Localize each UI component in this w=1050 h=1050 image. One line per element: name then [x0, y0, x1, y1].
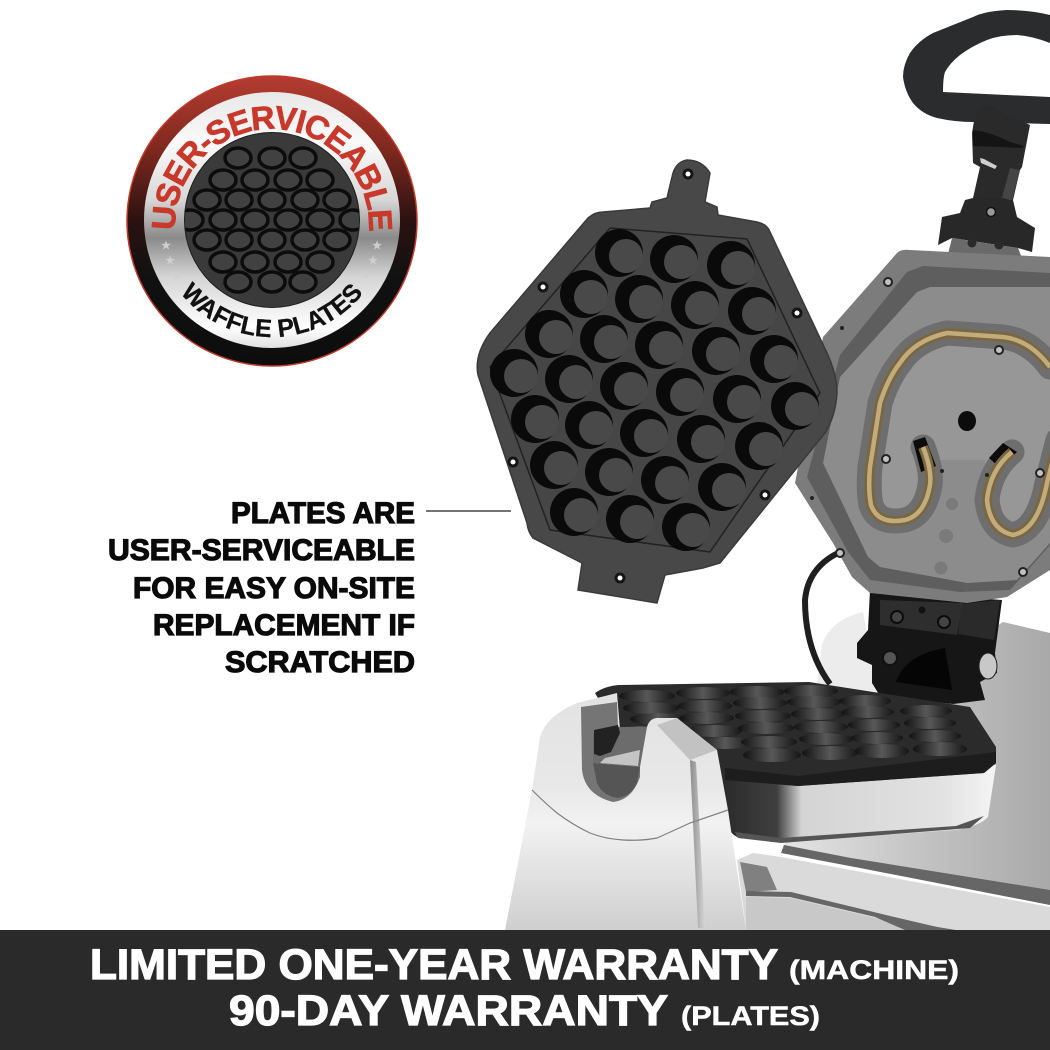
- lid inner field: [874, 345, 1050, 525]
- callout text: SCRATCHED: [225, 646, 415, 679]
- badge stars: ★: [372, 240, 382, 252]
- center hole: [958, 411, 976, 431]
- cup floors: [504, 239, 819, 547]
- plate cups: [490, 229, 819, 551]
- product: waffle maker: [477, 10, 1050, 930]
- footer warranty text: [90, 941, 959, 1035]
- lid bumps: [934, 498, 958, 574]
- badge stars: ★: [172, 270, 182, 282]
- badge arc heading: USER-SERVICEABLE: [152, 106, 392, 231]
- badge stars: ★: [361, 269, 371, 281]
- slot wall: [581, 702, 640, 802]
- arm crease: [690, 760, 705, 928]
- arm chamfer: [657, 718, 717, 760]
- slot pivot parts: [593, 727, 647, 767]
- arm seam: [532, 790, 728, 840]
- base back housing: [784, 622, 1050, 905]
- lid screws: [836, 278, 1044, 576]
- warranty line one: (MACHINE): [789, 955, 959, 985]
- callout text: FOR EASY ON-SITE: [133, 572, 415, 605]
- badge plate photo: [185, 133, 359, 307]
- plate inner rim: [490, 228, 820, 552]
- badge: user-serviceable waffle plates: [126, 75, 418, 367]
- drip tray: [737, 853, 1050, 930]
- footer band: [0, 930, 1050, 1050]
- lower waffle plate: [595, 682, 996, 786]
- callout text: USER-SERVICEABLE: [108, 534, 415, 567]
- badge arc subheading: WAFFLE PLATES: [182, 281, 362, 338]
- callout text: [108, 497, 415, 679]
- stainless support arm: [505, 693, 746, 930]
- channel around element: [869, 333, 1050, 535]
- badge stars: ★: [368, 255, 378, 267]
- warranty line one: LIMITED ONE-YEAR WARRANTY: [90, 941, 778, 989]
- base left shoulder: [817, 612, 880, 700]
- power cord: [805, 553, 838, 684]
- handle bracket: [938, 197, 1035, 252]
- heating tube: [869, 333, 1050, 535]
- warranty line two: (PLATES): [681, 1001, 820, 1031]
- slots: [913, 437, 1017, 472]
- lid small dots: [810, 326, 989, 500]
- callout text: REPLACEMENT IF: [153, 609, 415, 642]
- base shadow band: [781, 845, 1050, 905]
- leader line: [426, 510, 511, 512]
- handle: [903, 10, 1050, 124]
- hinge: [857, 590, 1002, 704]
- plate mounting holes: [509, 170, 801, 582]
- lifted waffle plate: [477, 160, 837, 603]
- lower tray housing: [722, 765, 996, 843]
- callout text: PLATES ARE: [231, 497, 415, 530]
- warranty line two: 90-DAY WARRANTY: [229, 987, 668, 1035]
- badge stars: ★: [165, 255, 175, 267]
- handle stem: [972, 106, 1030, 200]
- badge stars: [161, 240, 382, 282]
- upper lid with heating element: [795, 250, 1050, 603]
- badge stars: ★: [161, 240, 171, 252]
